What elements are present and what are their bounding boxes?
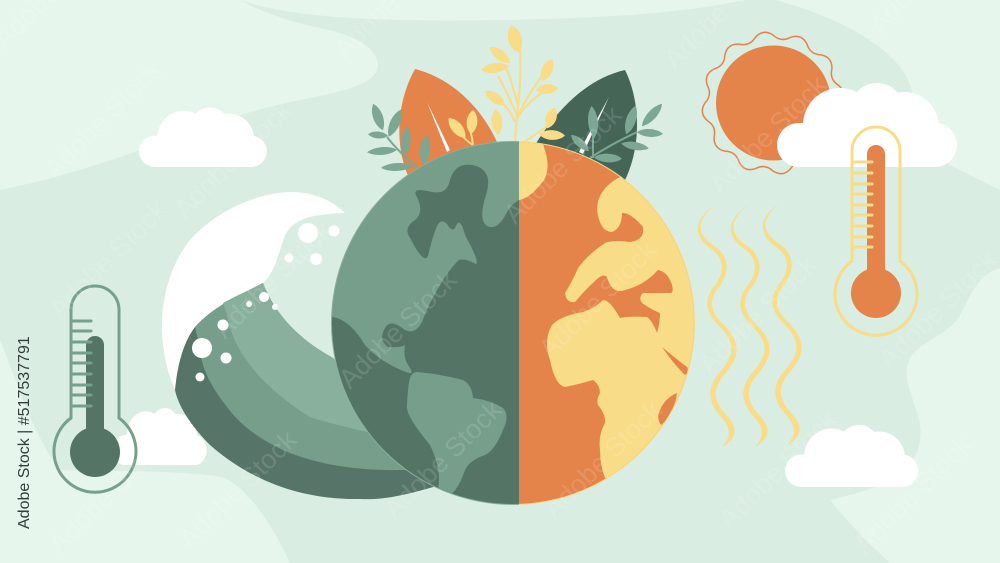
- watermark: repeated diagonal stock text: Adobe Stock: [378, 394, 508, 524]
- watermark: repeated diagonal stock text: Adobe Stock: [533, 234, 663, 364]
- sun: [702, 32, 844, 174]
- watermark: repeated diagonal stock text: Adobe Stock: [498, 99, 628, 229]
- watermark: repeated diagonal stock text: Adobe Stock: [43, 194, 173, 324]
- globe: cool green half: [332, 142, 519, 504]
- watermark: repeated diagonal stock text: Adobe Stock: [873, 244, 1000, 374]
- cloud: lower left: [113, 408, 207, 465]
- cloud: lower right: [785, 425, 918, 487]
- heat waves: [698, 203, 802, 447]
- globe: [331, 141, 695, 505]
- watermark: repeated diagonal stock text: Adobe Stock: [208, 214, 338, 344]
- cloud: top left: [139, 107, 267, 167]
- watermark: repeated diagonal stock text: Adobe Stock: [173, 424, 303, 554]
- watermark: repeated diagonal stock text: Adobe Stock: [703, 69, 833, 199]
- wave: water body: [175, 223, 440, 499]
- sprig: green left: [367, 102, 431, 172]
- thermometer: hot: [835, 127, 917, 335]
- globe: hot orange half: [519, 142, 694, 504]
- leaf: orange: [399, 69, 497, 180]
- cloud: big right, over sun: [777, 83, 957, 167]
- watermark: repeated diagonal stock text: Adobe Stock: [538, 394, 668, 524]
- watermark: repeated diagonal stock text: Adobe Stock: [333, 264, 463, 394]
- sprig: green right: [568, 101, 665, 163]
- thermometer: cold: [54, 286, 136, 492]
- sun: wavy corona: [702, 32, 844, 174]
- plant: yellow center: [480, 24, 565, 142]
- sprig: yellow small on orange leaf: [445, 110, 478, 145]
- leaf: dark green: [535, 70, 637, 180]
- wave: white crest: [162, 192, 345, 392]
- watermark: repeated diagonal stock text: Adobe Stock: [38, 54, 168, 184]
- watermark: repeated diagonal stock text: Adobe Stock: [848, 429, 978, 559]
- cold thermometer scale ticks: [72, 321, 91, 406]
- watermark: repeated diagonal stock text: Adobe Stock: [43, 429, 173, 559]
- watermark: repeated diagonal stock text: Adobe Stock: [693, 249, 823, 379]
- hot thermometer scale ticks: [853, 162, 872, 247]
- watermark: repeated diagonal stock text: Adobe Stock: [713, 404, 843, 534]
- foam bubbles: [192, 223, 340, 382]
- vertical stock id label: Adobe Stock | #517537791: [16, 336, 33, 529]
- watermark: repeated diagonal stock text: Adobe Stock: [168, 94, 298, 224]
